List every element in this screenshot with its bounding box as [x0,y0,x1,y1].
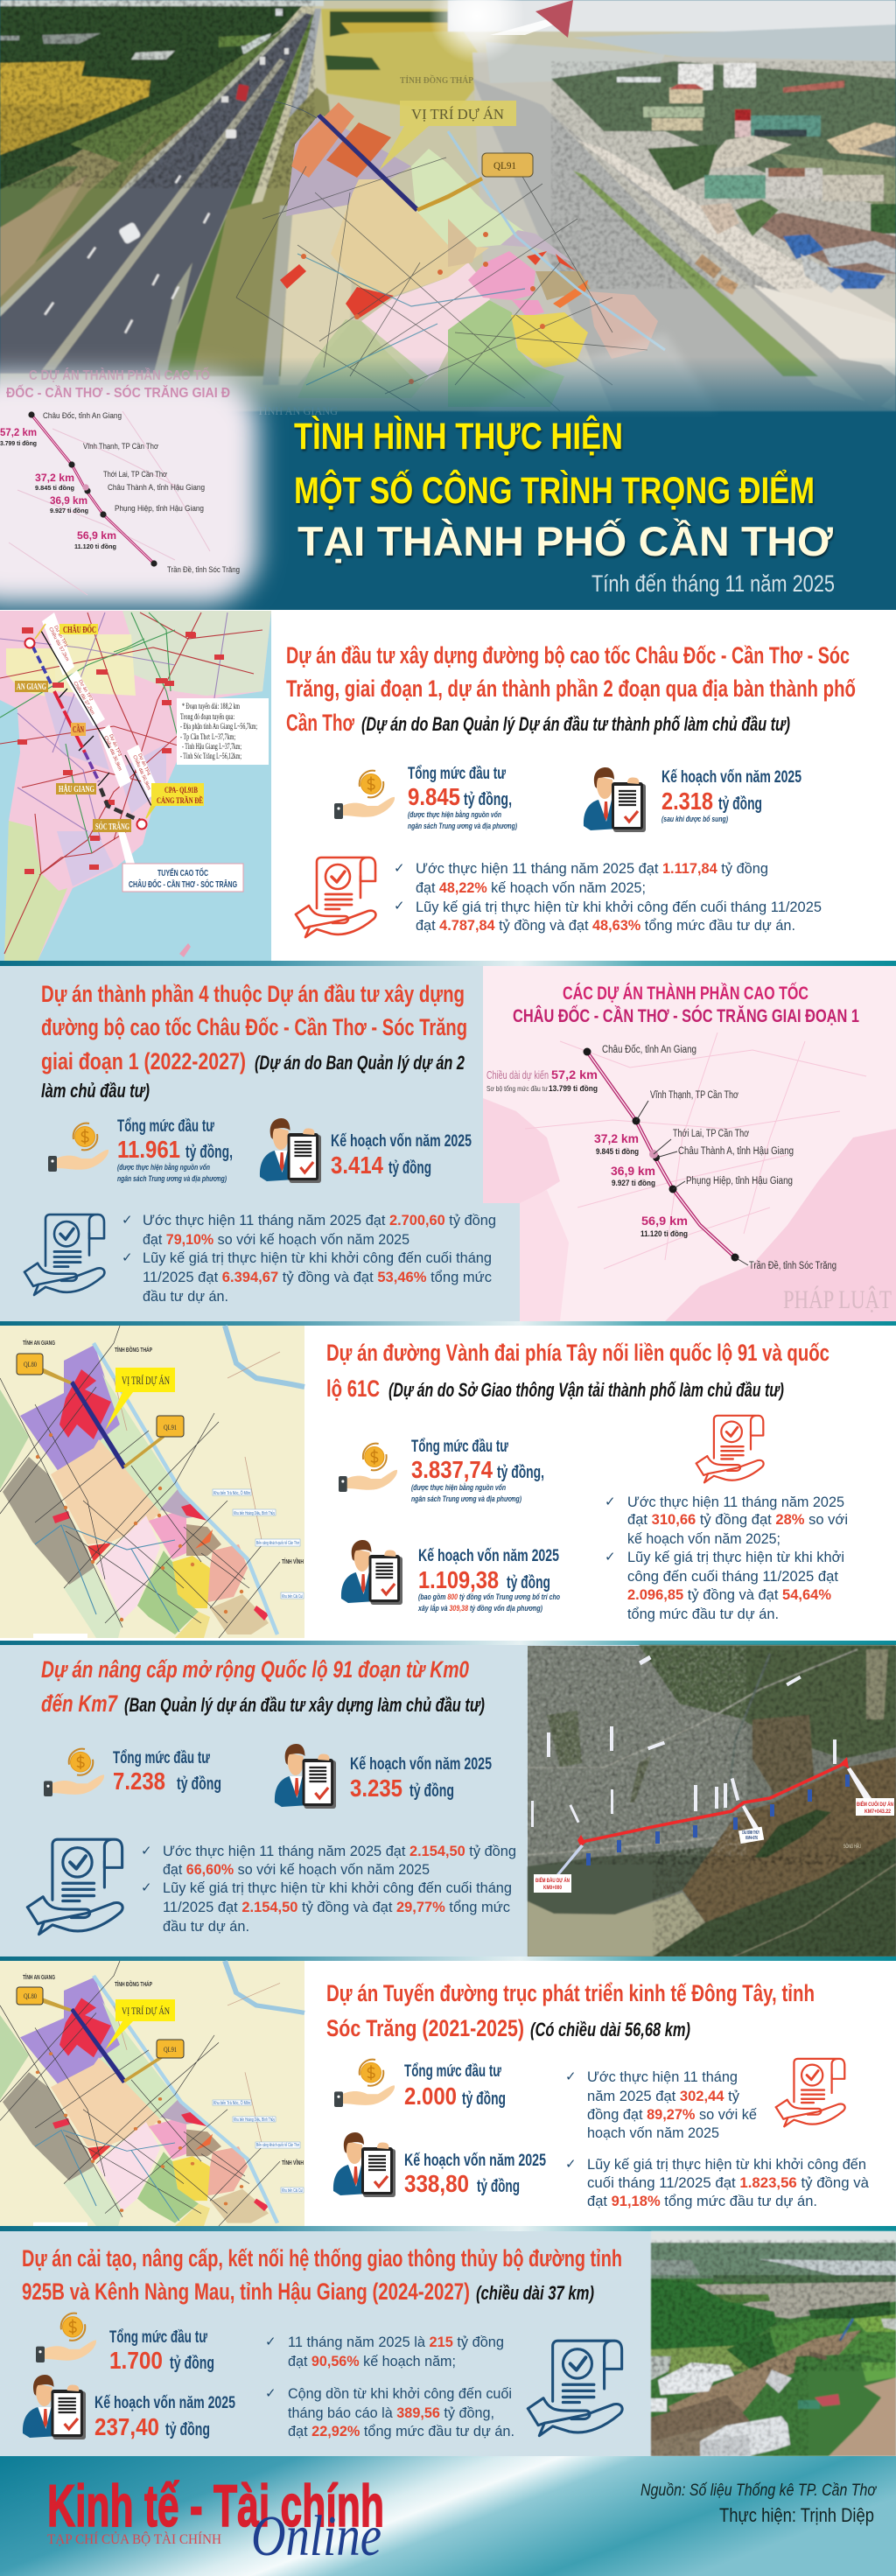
map: project location: QL80 [24,1361,37,1368]
route labels: 56,9 km [641,1214,688,1228]
progress bullets [122,1212,496,1305]
map: project location: Khu bến Trà Nóc, Ô Môn [214,1490,250,1496]
progress bullets: Ước thực hiện 11 tháng năm 2025 đạt 2.700,60 tỷ đồng [143,1212,496,1228]
inset route map vignette: 3.799 tỉ đồng [0,439,37,447]
map: expressway route [0,611,271,961]
progress bullets: cuối tháng 11/2025 đạt 1.823,56 tỷ đồng và [587,2174,870,2191]
progress bullets: đạt 66,60% so với kế hoạch vốn năm 2025 [163,1861,430,1878]
stat: total investment: 9.845 [408,783,460,810]
map: expressway route: Dự án TP1 [52,625,68,648]
stat: 2025 capital plan: xây lắp và 309,38 tỷ đồng vốn địa phương) [417,1603,542,1614]
icon: receipt in hand [776,2059,845,2126]
heading: giai đoạn 1 (2022-2027) [41,1048,246,1074]
map: expressway route: CẦN [73,724,84,735]
progress bullets: tháng báo cáo là 389,56 tỷ đồng, [288,2404,494,2421]
panel: project 5 East-West axis road [0,1961,896,2226]
inset route map vignette: 37,2 km [35,472,74,484]
icon: receipt in hand [296,858,375,937]
map: expressway route: - Tp Cần Thơ: L~37,7km; [180,732,235,741]
progress bullets: đạt 22,92% tổng mức đầu tư dự án. [288,2423,514,2440]
progress bullets: đạt 310,66 tỷ đồng đạt 28% so với [627,1511,848,1528]
icon: money in hand [36,2314,96,2362]
stat: 2025 capital plan [350,1755,492,1802]
stat: 2025 capital plan: (bao gồm 800 tỷ đồng vốn Trung ương bố trí cho [418,1592,560,1602]
progress bullets: năm 2025 đạt 302,44 tỷ [587,2088,739,2104]
stat: 2025 capital plan: 338,80 [404,2170,469,2197]
icon: person with document [260,1118,321,1183]
satellite map: CẦU BÌNH THỦY [742,1829,760,1836]
stat: 2025 capital plan: (sau khi được bổ sung) [662,815,728,824]
progress bullets: đạt 4.787,84 tỷ đồng và đạt 48,63% tổng mức đầu tư dự án. [416,917,795,934]
stat: total investment: (được thực hiện bằng nguồn vốn [408,809,501,820]
progress bullets: ✓ [141,1880,152,1895]
stat: total investment: ngân sách Trung ương và địa phương) [411,1494,522,1504]
stat: total investment: 7.238 [113,1768,165,1795]
map: expressway route: CẢNG TRẦN ĐỀ [157,794,203,806]
title [294,415,834,564]
heading [41,981,467,1102]
satellite map: SÔNG HẬU [844,1844,861,1850]
callout: QL91: QL91 [494,159,516,172]
progress bullets [141,1843,516,1935]
icon: money in hand [48,1124,108,1172]
heading: đường bộ cao tốc Châu Đốc - Cần Thơ - Sóc Trăng [41,1014,467,1040]
map: project location: TỈNH AN GIANG [23,1339,55,1347]
route labels: Sơ bộ tổng mức đầu tư [486,1084,548,1093]
map: project location: TỈNH VĨNH [282,1558,304,1565]
callout: QL91 [482,153,533,177]
map: expressway route: - Tỉnh Hậu Giang L~37,7km; [182,742,242,751]
title: TÌNH HÌNH THỰC HIỆN [294,415,623,458]
stat: 2025 capital plan: tỷ đồng [165,2420,210,2440]
photo: construction site [651,2231,896,2456]
progress bullets [565,2068,870,2209]
map: expressway route: HẬU GIANG [59,783,94,794]
satellite map: ĐIỂM ĐẦU DỰ ÁN [536,1875,570,1884]
stat: total investment: ngân sách Trung ương và địa phương) [117,1174,227,1184]
stat: 2025 capital plan: 1.109,38 [418,1566,499,1593]
stat: total investment [117,1117,233,1184]
map: expressway route: Chiều dài 37,2km [72,681,95,716]
stat: total investment: Tổng mức đầu tư [404,2062,501,2081]
progress bullets: Ước thực hiện 11 tháng năm 2025 đạt 2.154,50 tỷ đồng [163,1843,516,1859]
icon: money in hand [334,771,395,819]
inset route map vignette: C DỰ ÁN THÀNH PHẦN CAO TỐ [29,366,210,383]
inset route map vignette: Vĩnh Thạnh, TP Cần Thơ [83,442,158,452]
hero banner [0,0,896,610]
stat: total investment: tỷ đồng, [497,1463,544,1482]
icon: receipt in hand [27,1839,122,1935]
progress bullets: ✓ [265,2334,276,2349]
icon: person with document [341,1540,402,1605]
heading: lộ 61C [326,1376,380,1402]
progress bullets: ✓ [122,1250,133,1265]
icon: person with document [275,1744,336,1809]
progress bullets [265,2334,514,2440]
icon: person with document [333,2132,396,2197]
progress bullets: ✓ [394,898,405,914]
heading: Dự án cải tạo, nâng cấp, kết nối hệ thống giao thông thủy bộ đường tỉnh [22,2245,622,2272]
stat: 2025 capital plan: Kế hoạch vốn năm 2025 [94,2394,235,2412]
stat: 2025 capital plan: tỷ đồng [410,1782,454,1801]
map: expressway route: AN GIANG [17,682,46,692]
inset route map vignette: Thới Lai, TP Cần Thơ [103,470,167,480]
hero photo collage: expressway, project map and town [0,0,896,411]
stat: 2025 capital plan: Kế hoạch vốn năm 2025 [418,1547,559,1565]
heading: Sóc Trăng (2021-2025) [326,2015,524,2041]
inset route map vignette: 36,9 km [50,494,88,507]
route labels: 37,2 km [594,1132,639,1145]
stat: 2025 capital plan: tỷ đồng [477,2177,520,2196]
progress bullets: công đến cuối tháng 11/2025 đạt [627,1568,838,1585]
stat: total investment: tỷ đồng [177,1774,221,1794]
heading: Cần Thơ [286,710,355,736]
map: expressway route: Dự án TP3 [108,733,122,757]
panel: project 3 western ring road [0,1326,896,1641]
stat: 2025 capital plan: Kế hoạch vốn năm 2025 [331,1132,472,1151]
heading: (Dự án do Ban Quản lý dự án 2 [255,1052,466,1074]
inset route map vignette: 56,9 km [77,529,116,542]
map: project location: VỊ TRÍ DỰ ÁN [122,2005,170,2017]
stat: total investment: ngân sách Trung ương và địa phương) [408,822,517,831]
logo: Kinh tế - Tài chính Online: Kinh tế - Tài chính [47,2473,384,2539]
map: project location: Bến cảng khách quốc tế Cần Thơ [256,2143,299,2148]
inset route map vignette: ĐỐC - CẦN THƠ - SÓC TRĂNG GIAI Đ [6,383,230,401]
route labels: Phụng Hiệp, tỉnh Hậu Giang [686,1176,793,1186]
stat: total investment [109,2328,214,2374]
stat: 2025 capital plan: 3.414 [331,1152,383,1179]
progress bullets: ✓ [565,2068,577,2084]
heading: làm chủ đầu tư) [41,1080,150,1102]
stat: 2025 capital plan [417,1547,560,1614]
heading: (chiều dài 37 km) [476,2282,594,2304]
stat: total investment: Tổng mức đầu tư [117,1117,214,1136]
stat: 2025 capital plan: Kế hoạch vốn năm 2025 [404,2152,546,2170]
stat: 2025 capital plan [404,2152,546,2197]
panel: project 4 national road 91 widening [0,1645,896,1960]
heading [326,1980,815,2041]
stat: total investment: tỷ đồng [170,2354,214,2373]
stat: total investment: (được thực hiện bằng nguồn vốn [117,1162,210,1172]
route labels [486,1045,836,1271]
stat: total investment: Tổng mức đầu tư [113,1749,210,1768]
map: project location: TỈNH VĨNH [282,2159,304,2166]
map: expressway route: TUYẾN CAO TỐC [158,866,208,878]
progress bullets: Lũy kế giá trị thực hiện từ khi khởi công đến cuối tháng [143,1250,492,1266]
stat: total investment [408,765,517,831]
map: expressway route: - Tỉnh Sóc Trăng L~56,12km; [180,752,242,760]
logo: Kinh tế - Tài chính Online: Online [251,2504,382,2568]
progress bullets: Lũy kế giá trị thực hiện từ khi khởi công đến [587,2156,866,2173]
map: expressway route: - Địa phận tỉnh An Giang L~56,7km; [180,722,257,731]
stat: 2025 capital plan: tỷ đồng [718,794,762,814]
stat: total investment: Tổng mức đầu tư [408,765,506,783]
map: project location: TỈNH ĐỒNG THÁP [115,1345,152,1354]
map: expressway route: Dự án TP2 [77,679,94,702]
progress bullets: ✓ [394,860,405,876]
heading: Dự án nâng cấp mở rộng Quốc lộ 91 đoạn từ Km0 [41,1656,469,1683]
heading [326,1340,830,1402]
stat: 2025 capital plan: tỷ đồng [388,1158,431,1178]
map: expressway route: Dự án TP4 [136,752,151,776]
map: project location: QL91 [164,2046,177,2054]
icon: person with document [23,2375,86,2440]
icon: person with document [584,767,646,832]
map: expressway route: CPA- QL91B [164,787,198,795]
progress bullets: 2.096,85 tỷ đồng và đạt 54,64% [627,1586,831,1603]
icon: receipt in hand [696,1416,764,1482]
stat: 2025 capital plan [331,1132,472,1179]
inset route map vignette: Châu Thành A, tỉnh Hậu Giang [108,483,205,493]
heading [286,642,856,736]
route labels: Thới Lai, TP Cần Thơ [673,1129,749,1139]
progress bullets: ✓ [605,1549,616,1564]
panel: project 2 component 4 [0,966,896,1321]
progress bullets: ✓ [565,2156,577,2172]
logo: Kinh tế - Tài chính Online [47,2473,384,2568]
map: expressway route: CHÂU ĐỐC [63,624,96,635]
route labels: Vĩnh Thạnh, TP Cần Thơ [650,1090,738,1101]
map title: CÁC DỰ ÁN THÀNH PHẦN CAO TỐC [563,983,808,1004]
icon: receipt in hand [528,2341,622,2436]
map: expressway route: Chiều dài 56,9km [131,754,151,791]
progress bullets: ✓ [265,2385,276,2401]
progress bullets: tổng mức đầu tư dự án. [627,1606,779,1622]
heading [41,1656,485,1717]
map: project location: Bến cảng khách quốc tế Cần Thơ [256,1541,299,1546]
progress bullets: kế hoạch vốn năm 2025; [627,1530,780,1547]
progress bullets: Lũy kế giá trị thực hiện từ khi khởi công đến cuối tháng [163,1880,512,1896]
stat: total investment [404,2062,506,2110]
progress bullets: hoạch vốn năm 2025 [587,2124,719,2141]
map: project location: Khu bến Hoàng Diệu, Bình Thủy [234,1510,275,1516]
stat: 2025 capital plan [662,768,802,824]
progress bullets: đạt 91,18% tổng mức đầu tư dự án. [587,2193,817,2209]
progress bullets: đầu tư dự án. [143,1288,228,1305]
stat: total investment: tỷ đồng, [464,790,512,809]
stat: total investment [113,1749,221,1795]
heading: đến Km7 [41,1690,119,1717]
icon: money in hand [44,1749,104,1796]
map: expressway route: * Đoạn tuyến dài: 188,2 km [182,702,240,710]
title: TẠI THÀNH PHỐ CẦN THƠ [298,518,834,564]
stat: 2025 capital plan: Kế hoạch vốn năm 2025 [350,1755,492,1774]
satellite map: KM4+976 [746,1836,758,1841]
progress bullets: đồng đạt 89,27% so với kế [587,2106,758,2123]
route labels: 57,2 km [551,1068,598,1082]
inset route map vignette: Phụng Hiệp, tỉnh Hậu Giang [115,504,204,514]
satellite map [528,1645,896,1960]
route labels: 11.120 tỉ đồng [640,1229,688,1239]
heading [22,2245,622,2305]
stat: total investment: Tổng mức đầu tư [109,2328,207,2347]
map: project location: TỈNH AN GIANG [23,1973,55,1981]
route labels: Châu Thành A, tỉnh Hậu Giang [678,1146,794,1157]
map: project location: Khu bến Hoàng Diệu, Bình Thủy [234,2117,275,2123]
footer [0,2456,896,2576]
progress bullets: Ước thực hiện 11 tháng năm 2025 đạt 1.117,84 tỷ đồng [416,860,768,877]
stat: 2025 capital plan: 3.235 [350,1774,402,1802]
map title [513,983,859,1026]
map: project location: QL80 [24,1992,37,2000]
map: expressway route: Trong đó đoạn tuyến qua: [180,712,234,721]
map: expressway route: Chiều dài 36,9km [102,735,122,772]
stat: total investment: tỷ đồng, [186,1143,233,1162]
panel: project 6 provincial road 925B and Nàng Mau canal [0,2231,896,2456]
source and credit [640,2482,877,2526]
route labels: Trần Đề, tỉnh Sóc Trăng [749,1261,836,1271]
map: project location: Khu bến Trà Nóc, Ô Môn [214,2100,250,2106]
stat: 2025 capital plan: 2.318 [662,788,713,815]
map: project location: Khu bến Cái Cui [282,1594,303,1600]
progress bullets: 11/2025 đạt 2.154,50 tỷ đồng và đạt 29,77% tổng mức [163,1899,510,1915]
inset route map vignette [0,366,258,604]
stat: total investment [411,1438,544,1504]
icon: receipt in hand [24,1214,104,1295]
map: project location: QL91 [164,1424,177,1432]
progress bullets: Ước thực hiện 11 tháng [587,2068,738,2085]
inset route map vignette: 9.927 tỉ đồng [50,507,88,514]
route labels: 9.845 tỉ đồng [596,1147,639,1157]
heading: 925B và Kênh Nàng Mau, tỉnh Hậu Giang (2024-2027) [22,2278,470,2305]
inset route map vignette: 57,2 km [0,426,37,438]
map: project location [0,1961,304,2226]
satellite map: KM0+000 [543,1885,562,1891]
map: expressway route: SÓC TRĂNG [95,822,130,832]
stat: 2025 capital plan: 237,40 [94,2413,159,2440]
progress bullets: đầu tư dự án. [163,1918,249,1935]
map: project location [0,1326,304,1638]
inset route map vignette: 9.845 tỉ đồng [35,484,74,492]
icon: money in hand [334,2060,395,2107]
map: project location: VỊ TRÍ DỰ ÁN [122,1374,170,1387]
hero banner: TỈNH AN GIANG [257,404,338,417]
progress bullets [394,860,822,934]
progress bullets: Cộng dồn từ khi khởi công đến cuối [288,2385,512,2402]
callout: project location: VỊ TRÍ DỰ ÁN [411,106,504,122]
date line: Tính đến tháng 11 năm 2025 [592,570,835,597]
inset route map vignette: Trần Đề, tỉnh Sóc Trăng [167,565,240,575]
hero photo collage: expressway, project map and town: TỈNH ĐỒNG THÁP [400,74,473,86]
progress bullets [605,1494,848,1622]
route labels: 13.799 tỉ đồng [549,1084,598,1094]
progress bullets: 11 tháng năm 2025 là 215 tỷ đồng [288,2334,504,2350]
progress bullets: đạt 48,22% kế hoạch vốn năm 2025; [416,879,646,896]
heading: (Có chiều dài 56,68 km) [530,2019,690,2040]
stat: total investment: 11.961 [117,1136,180,1163]
progress bullets: 11/2025 đạt 6.394,67 tỷ đồng và đạt 53,46% tổng mức [143,1269,492,1285]
progress bullets: Lũy kế giá trị thực hiện từ khi khởi [627,1549,844,1565]
stat: 2025 capital plan: tỷ đồng [507,1573,550,1592]
stat: total investment: 1.700 [109,2347,163,2374]
route labels: Chiều dài dự kiến [486,1069,549,1082]
heading: (Ban Quản lý dự án đầu tư xây dựng làm chủ đầu tư) [124,1694,485,1716]
progress bullets: ✓ [122,1212,133,1228]
progress bullets: ✓ [605,1494,616,1509]
inset route map vignette: 11.120 tỉ đồng [74,542,116,550]
stat: 2025 capital plan [94,2394,235,2440]
progress bullets: đạt 90,56% kế hoạch năm; [288,2353,456,2370]
progress bullets: Lũy kế giá trị thực hiện từ khi khởi công đến cuối tháng 11/2025 [416,899,822,915]
map: component projects route [483,966,896,1321]
map: expressway route: CHÂU ĐỐC - CẦN THƠ - SÓC TRĂNG [129,878,237,890]
logo: Kinh tế - Tài chính Online: TẠP CHÍ CỦA BỘ TÀI CHÍNH [47,2530,221,2547]
map: project location: TỈNH ĐỒNG THÁP [115,1979,152,1988]
route labels: Châu Đốc, tỉnh An Giang [602,1045,696,1055]
route labels: 36,9 km [611,1165,655,1178]
map: project location: Khu bến Cái Cui [282,2188,303,2194]
stat: 2025 capital plan: Kế hoạch vốn năm 2025 [662,768,802,787]
stat: total investment: 2.000 [404,2082,457,2110]
stat: total investment: Tổng mức đầu tư [411,1438,508,1456]
map: expressway route: Chiều dài 57,2km [47,626,70,662]
progress bullets: đạt 79,10% so với kế hoạch vốn năm 2025 [143,1231,410,1248]
stat: total investment: (được thực hiện bằng nguồn vốn [411,1482,506,1493]
progress bullets: Ước thực hiện 11 tháng năm 2025 [627,1494,844,1510]
route line [583,1048,748,1265]
heading: Dự án thành phần 4 thuộc Dự án đầu tư xây dựng [41,981,465,1007]
progress bullets: ✓ [141,1843,152,1858]
route labels: 9.927 tỉ đồng [612,1179,655,1188]
callout: project location [379,101,516,171]
icon: money in hand [339,1444,397,1492]
stat: total investment: tỷ đồng [462,2090,506,2109]
inset route map vignette: Châu Đốc, tỉnh An Giang [43,411,122,421]
panel: project 1 Châu Đốc expressway component 2 [0,611,896,961]
stat: total investment: 3.837,74 [411,1456,493,1483]
